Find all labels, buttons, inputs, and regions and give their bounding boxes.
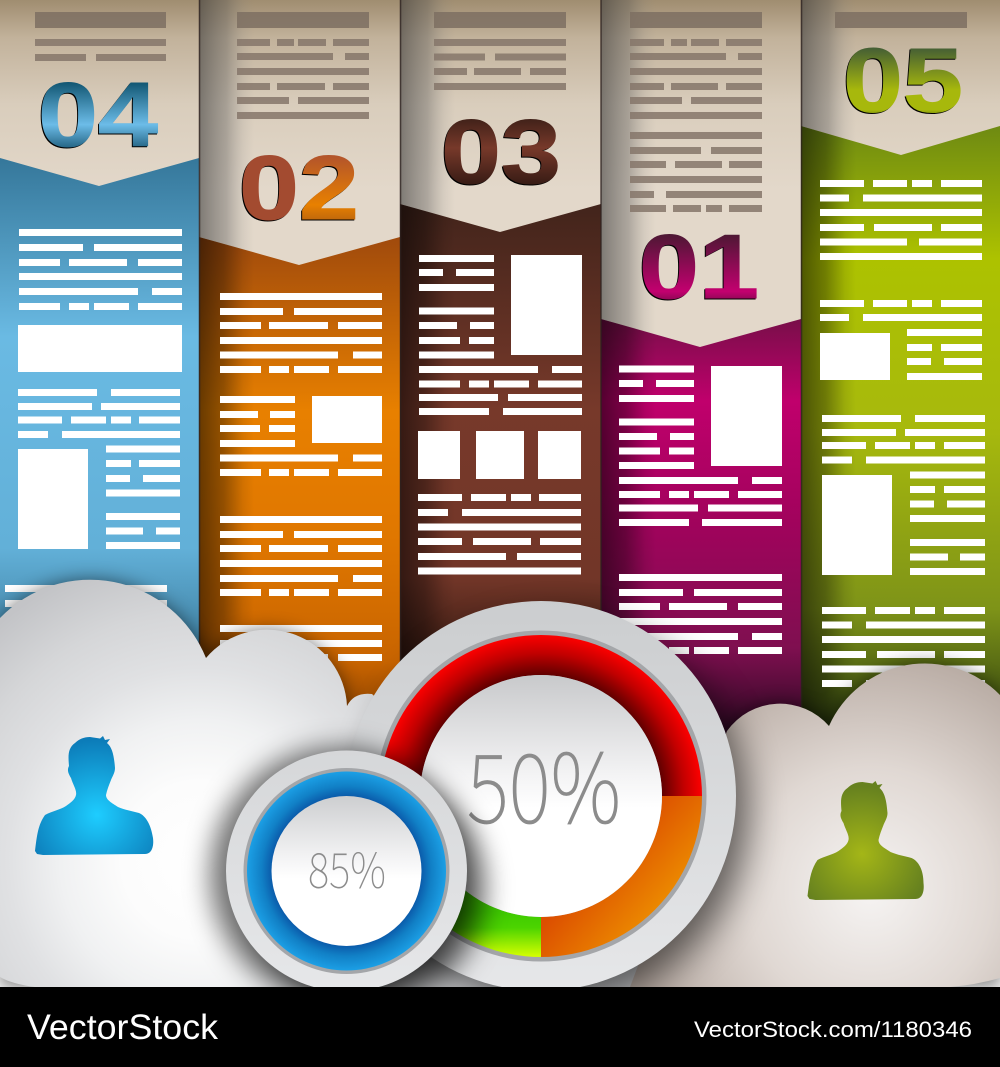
column 04 blue bbox=[0, 0, 199, 760]
big ring grey rim bbox=[376, 630, 706, 962]
small percentage ring chart bbox=[226, 750, 467, 992]
footer bar bbox=[0, 987, 1000, 1067]
column 02 header title bar bbox=[237, 12, 369, 28]
column 05 green bbox=[801, 0, 1000, 770]
column 01 tall image placeholder bbox=[711, 366, 782, 466]
column 02 image placeholder bbox=[312, 396, 382, 443]
column 03 header title bar bbox=[434, 12, 566, 28]
column 02 paper header bbox=[199, 0, 400, 280]
small ring shadows bbox=[210, 747, 486, 1006]
column 04 white text lines bbox=[5, 232, 182, 604]
orange segment bbox=[541, 796, 702, 957]
column 03 header text lines bbox=[434, 42, 566, 86]
column 05 white text lines bbox=[820, 184, 985, 684]
column 04 wide image placeholder bbox=[18, 325, 182, 372]
column 02 body fold shading bbox=[199, 237, 254, 760]
column 03 coloured body bbox=[400, 204, 601, 760]
right cloud bbox=[630, 663, 1000, 987]
column 02 header text lines bbox=[237, 42, 369, 116]
green segment bbox=[380, 796, 541, 957]
footer url text: VectorStock.com/1180346 bbox=[694, 1017, 972, 1042]
column 03 paper fold shading bbox=[400, 0, 455, 219]
column 03 white text lines bbox=[418, 258, 582, 571]
column 04 coloured body bbox=[0, 158, 199, 760]
column 04 header text lines bbox=[35, 12, 166, 28]
small ring white face bbox=[272, 796, 422, 946]
column 01 coloured body bbox=[601, 319, 801, 770]
big percentage ring chart bbox=[346, 601, 736, 991]
column 01 white text lines bbox=[619, 369, 782, 650]
column 03 brown bbox=[400, 0, 601, 760]
big ring outer disc bbox=[346, 601, 736, 991]
number 05: 05 bbox=[842, 32, 962, 132]
column 03 paper header bbox=[400, 0, 601, 240]
small ring grey rim bbox=[244, 768, 450, 974]
column 02 coloured body bbox=[199, 237, 400, 760]
column 04 header subtext lines bbox=[35, 42, 166, 58]
number 01: 01 bbox=[638, 218, 758, 319]
column 01 paper header bbox=[601, 0, 801, 360]
small ring outer disc bbox=[226, 750, 467, 992]
number 01: 01 bbox=[639, 217, 759, 318]
column 05 body fold shading bbox=[801, 126, 856, 770]
column 04 tall image placeholder bbox=[18, 449, 88, 549]
number 03: 03 bbox=[441, 102, 561, 203]
label 85%: 85% bbox=[308, 832, 386, 903]
cloud shadows bbox=[0, 580, 1000, 987]
footer logo text: VectorStock bbox=[27, 1008, 219, 1047]
number 05: 05 bbox=[843, 30, 963, 132]
red segment bbox=[380, 635, 702, 796]
column 01 header text lines bbox=[630, 42, 762, 208]
blue band bbox=[247, 772, 446, 970]
column 05 tall image placeholder bbox=[822, 475, 892, 575]
column 05 header title bar bbox=[835, 12, 967, 28]
column 02 orange bbox=[199, 0, 400, 760]
number 03: 03 bbox=[440, 103, 560, 204]
column 05 paper header bbox=[801, 0, 1000, 170]
column 02 paper fold shading bbox=[199, 0, 254, 252]
column 01 body fold shading bbox=[601, 319, 656, 770]
big ring white face bbox=[420, 675, 662, 917]
number 04: 04 bbox=[38, 65, 158, 166]
column 05 image placeholder bbox=[820, 333, 890, 380]
number 02: 02 bbox=[238, 139, 358, 240]
column 03 body fold shading bbox=[400, 204, 455, 760]
column 03 tall image placeholder bbox=[511, 255, 582, 355]
column 01 paper fold shading bbox=[601, 0, 656, 334]
column 04 paper header bbox=[0, 0, 199, 200]
column 05 coloured body bbox=[801, 126, 1000, 770]
column 02 white text lines bbox=[220, 296, 382, 658]
column 05 paper fold shading bbox=[801, 0, 856, 142]
column 01 magenta bbox=[601, 0, 801, 770]
left cloud bbox=[0, 580, 680, 987]
column 03 square image placeholders bbox=[418, 431, 581, 479]
big ring shadow bbox=[364, 620, 748, 1004]
icon: green person bbox=[808, 781, 924, 900]
number 02: 02 bbox=[239, 138, 359, 239]
icon: blue person bbox=[35, 736, 153, 855]
column separators bbox=[200, 0, 802, 770]
label 50%: 50% bbox=[467, 712, 621, 851]
column 01 header title bar bbox=[630, 12, 762, 28]
number 04: 04 bbox=[37, 66, 157, 167]
